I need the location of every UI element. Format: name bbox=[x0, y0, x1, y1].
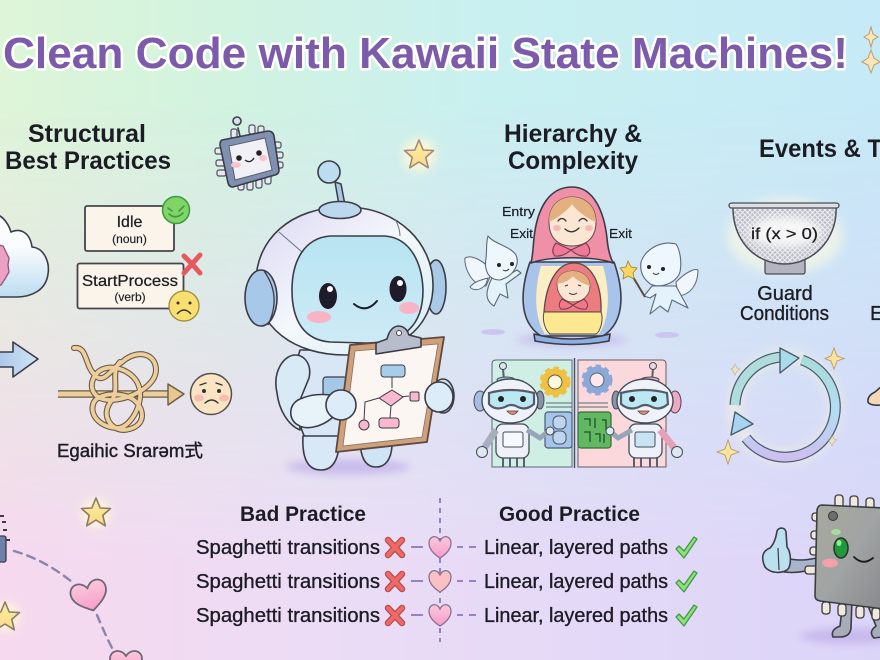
row 3: Spaghetti transitions bbox=[196, 605, 380, 627]
row 2: Spaghetti transitions bbox=[196, 571, 380, 593]
box: Idle noun: (noun) bbox=[112, 232, 147, 246]
icon: heart bbox=[68, 578, 111, 615]
outer face bbox=[549, 197, 596, 246]
box: StartProcess verb: StartProcess bbox=[82, 273, 178, 290]
divider lines bbox=[546, 403, 608, 407]
heading: bad practice: Bad Practice bbox=[240, 503, 366, 526]
left goggle robot bbox=[474, 362, 554, 467]
title: Clean Code with Kawaii State Machines! bbox=[3, 29, 848, 78]
icon: star bbox=[0, 602, 20, 631]
box: StartProcess verb bbox=[78, 264, 184, 308]
icon: worried yellow face bbox=[169, 291, 199, 321]
centre dashed divider bbox=[439, 498, 441, 642]
icon: blue gear bbox=[584, 367, 610, 393]
arm and thumb bbox=[763, 528, 816, 572]
antenna base bbox=[319, 202, 361, 218]
panel: robots comparison bbox=[474, 358, 682, 468]
clipboard bbox=[336, 326, 444, 452]
left ear bbox=[245, 270, 277, 326]
icon: small chip character bbox=[215, 117, 283, 190]
panel: bad vs good practice table bbox=[196, 498, 697, 642]
box: StartProcess verb: (verb) bbox=[114, 290, 146, 304]
flowchart bbox=[359, 365, 419, 430]
left half bbox=[492, 360, 572, 467]
icon: strainer bowl: if (x > 0) bbox=[751, 226, 818, 243]
pins bbox=[805, 495, 880, 620]
labels: entry and exit: Exit bbox=[609, 226, 632, 241]
green circuit tablet bbox=[578, 412, 611, 448]
right ear bbox=[426, 260, 446, 314]
helmet seams bbox=[279, 219, 400, 252]
row 3 bbox=[196, 605, 697, 627]
icon: star top centre bbox=[403, 139, 435, 171]
icon: arrow right bbox=[0, 342, 38, 377]
icon: green smile badge bbox=[162, 196, 190, 224]
heading: hierarchy and complexity bbox=[504, 120, 642, 175]
heading: structural best practices bbox=[5, 120, 171, 175]
caption: garbled label: Egaihic Srarəm式 bbox=[57, 441, 203, 461]
inner doll bbox=[543, 263, 602, 334]
icon: gold gear bbox=[542, 369, 568, 395]
character: thumbs-up chip bbox=[763, 495, 880, 644]
shadow bbox=[800, 628, 880, 644]
heading: good practice: Good Practice bbox=[499, 503, 640, 526]
box: Idle noun bbox=[85, 206, 174, 251]
icon: left fairy bbox=[465, 236, 521, 335]
heading: hierarchy and complexity: Hierarchy & bbox=[504, 120, 642, 148]
antenna bbox=[318, 161, 345, 205]
legs bbox=[832, 600, 880, 638]
icon: sad face bbox=[190, 374, 232, 414]
panel: structural best practices bbox=[0, 120, 232, 461]
panel: events and transitions bbox=[717, 135, 880, 464]
labels: entry and exit bbox=[502, 204, 632, 241]
row 2: Linear, layered paths bbox=[484, 571, 668, 593]
panel: hierarchy and complexity bbox=[465, 120, 698, 468]
labels: entry and exit: Exit bbox=[510, 226, 533, 241]
heading: structural best practices: Best Practices bbox=[5, 147, 171, 175]
clip bbox=[376, 326, 421, 354]
row 1: Linear, layered paths bbox=[484, 537, 668, 559]
face bbox=[307, 276, 419, 323]
hands bbox=[326, 382, 453, 420]
label: guard conditions: Conditions bbox=[740, 303, 829, 325]
icon: cloud with pink gear bbox=[0, 214, 48, 297]
outer bow bbox=[553, 243, 590, 256]
icon: strainer bowl bbox=[727, 198, 843, 274]
right arm behind clipboard bbox=[432, 379, 454, 413]
heading: structural best practices: Structural bbox=[28, 120, 146, 148]
dashed path bbox=[14, 551, 113, 650]
icon: right fairy with wand bbox=[620, 243, 698, 338]
box: Idle noun: Idle bbox=[117, 214, 142, 231]
row 2 bbox=[196, 571, 697, 593]
icon: heart cut off bbox=[110, 651, 142, 660]
heading: hierarchy and complexity: Complexity bbox=[508, 147, 638, 175]
icon: title sparkles bbox=[862, 27, 880, 73]
right goggle robot bbox=[606, 362, 682, 467]
blue tablet bbox=[545, 412, 572, 448]
icon: circular arrows bbox=[731, 348, 835, 457]
labels: entry and exit: Entry bbox=[502, 204, 536, 219]
visor bbox=[292, 236, 423, 343]
icon: star bbox=[82, 498, 110, 527]
row 1 bbox=[196, 537, 697, 559]
helmet bbox=[256, 207, 433, 355]
decoration: bottom-left path with hearts and stars bbox=[0, 498, 142, 660]
character: astronaut robot with clipboard bbox=[245, 161, 454, 475]
icon: red cross bbox=[184, 255, 200, 273]
chip fragment bbox=[0, 516, 10, 562]
icon: tangled noodle arrow bbox=[58, 348, 184, 430]
icon: sparkles bbox=[717, 348, 844, 464]
right half bbox=[578, 360, 666, 467]
icon: nesting doll bbox=[516, 187, 628, 347]
label: guard conditions bbox=[740, 283, 829, 325]
row 1: Spaghetti transitions bbox=[196, 537, 380, 559]
row 3: Linear, layered paths bbox=[484, 605, 668, 627]
shadow bbox=[286, 459, 410, 475]
body bbox=[276, 350, 412, 470]
chip body bbox=[815, 505, 880, 609]
label: guard conditions: Guard bbox=[757, 283, 813, 305]
icon: cut-off hand bbox=[868, 386, 880, 405]
face bbox=[822, 512, 873, 568]
